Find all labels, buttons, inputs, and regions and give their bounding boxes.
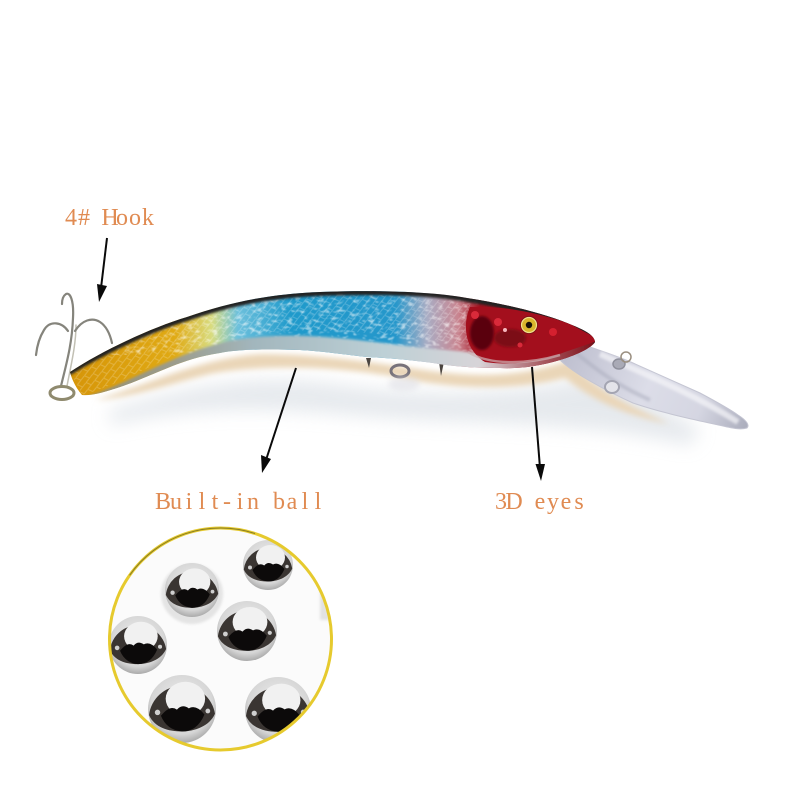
hook ring [50,386,74,400]
arrow: eyes [532,367,545,481]
lure shadow [95,354,700,445]
label: Built-in ball: Built-in ball [155,489,322,515]
lure body [70,291,595,396]
lure lip [560,343,748,429]
arrow: ball [261,368,296,473]
hook shank and barbs [36,294,112,386]
lure rear hook [36,294,112,400]
label: 3D eyes: 3D eyes [495,489,584,515]
eye [520,316,538,334]
glitter texture [100,291,478,355]
body colour band [70,291,595,396]
inset: steel balls [109,528,334,750]
belly [86,334,595,395]
belly hook eye and points [366,358,444,391]
scale texture [70,294,470,395]
head detail [466,307,600,364]
dark back [66,291,597,373]
inset background [110,529,330,749]
balls [109,540,334,743]
inset yellow ring [110,528,332,750]
label: 4# Hook: 4# Hook [65,205,154,231]
arrow: hook [97,238,107,302]
